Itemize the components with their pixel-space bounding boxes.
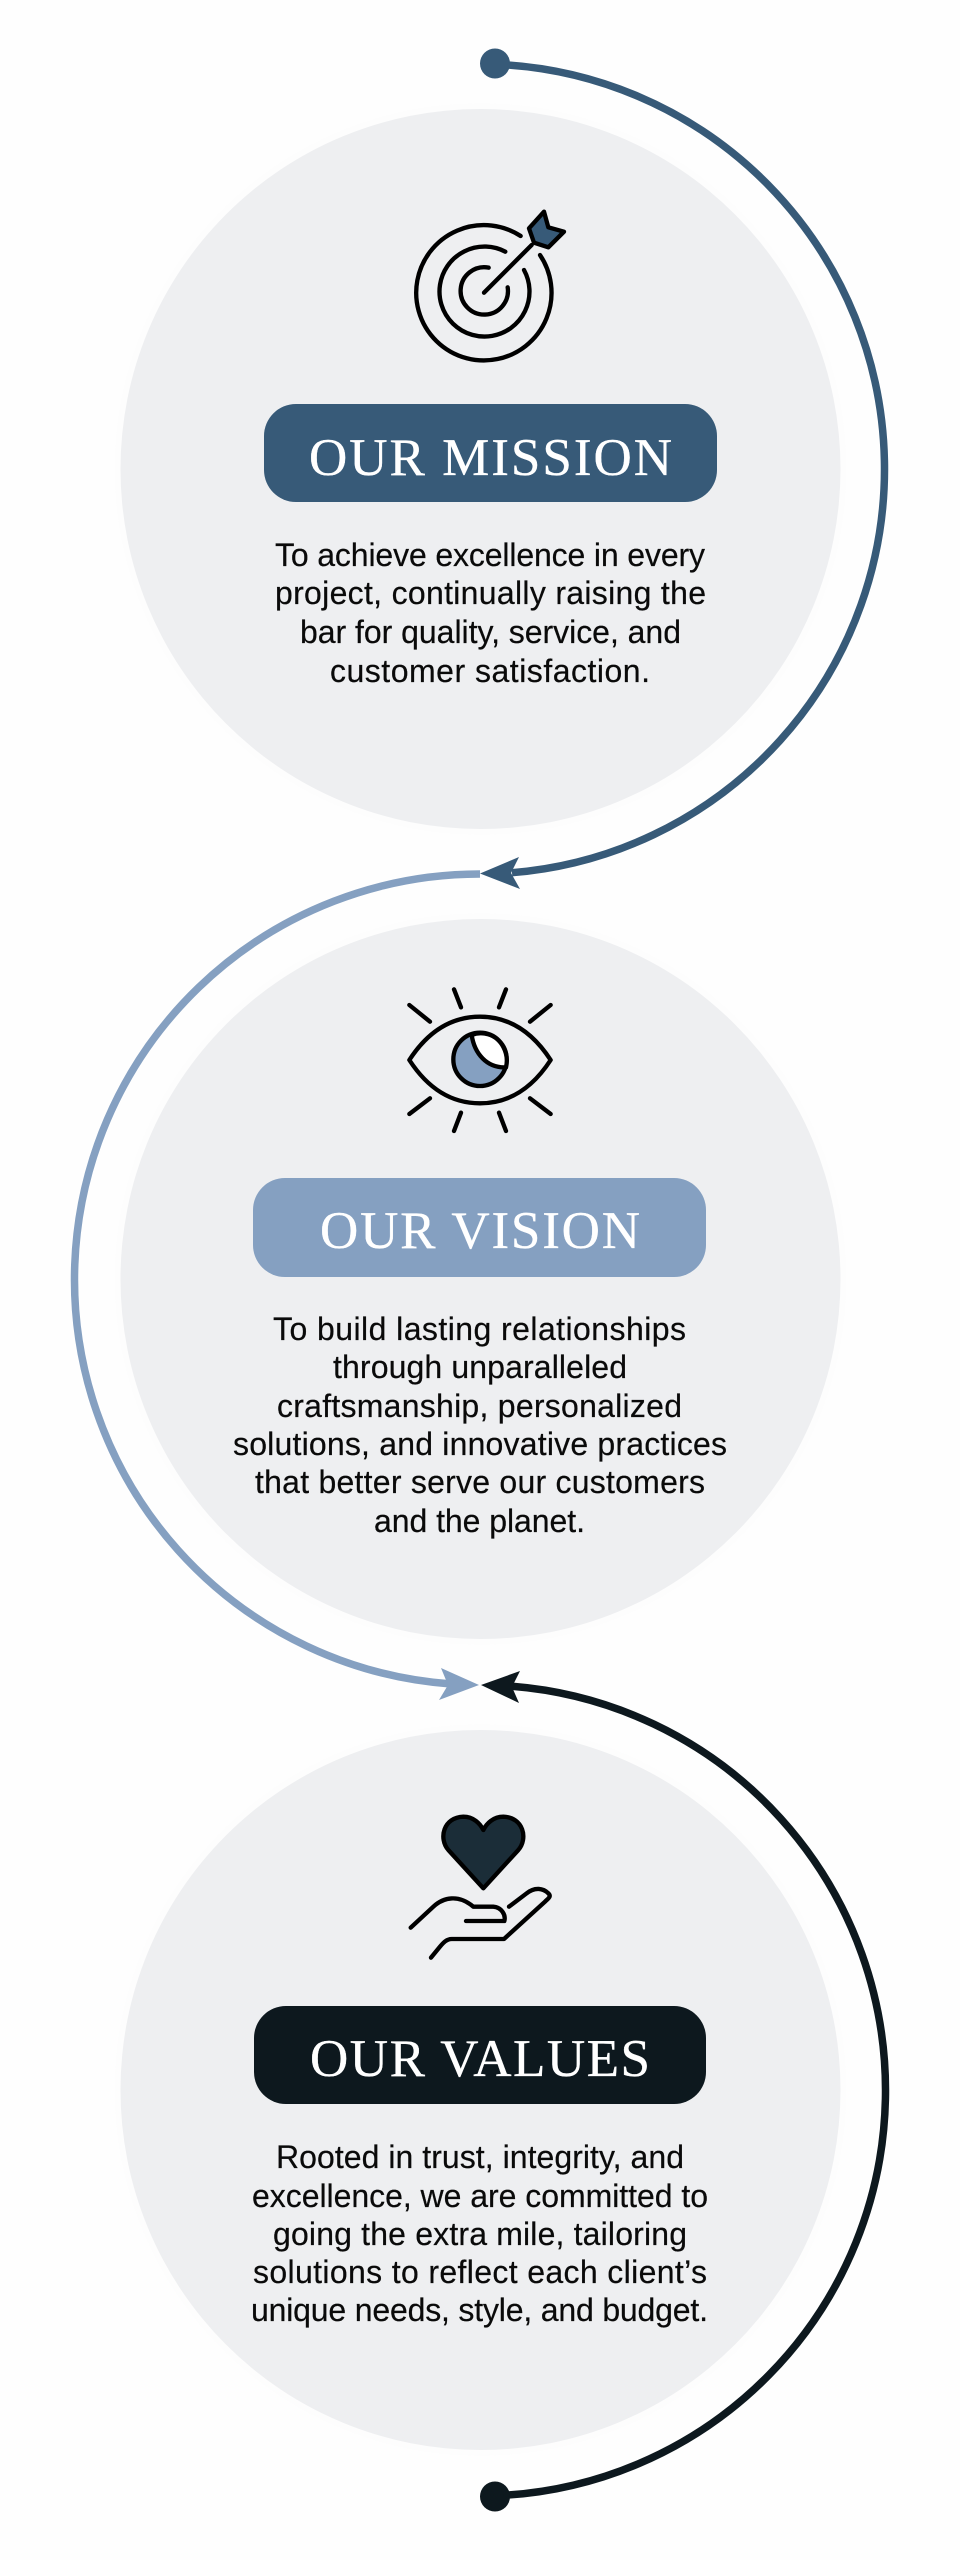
values text: excellence, we are committed to (252, 2178, 708, 2214)
values text: solutions to reflect each client’s (253, 2254, 707, 2290)
values text: Rooted in trust, integrity, and (276, 2139, 684, 2175)
vision text: that better serve our customers (255, 1464, 705, 1500)
heading pill: our values: OUR VALUES (310, 2030, 650, 2088)
mission text: project, continually raising the (275, 575, 706, 611)
mission text: customer satisfaction. (330, 653, 650, 689)
values text: going the extra mile, tailoring (273, 2216, 687, 2252)
vision text: and the planet. (374, 1503, 585, 1539)
heading pill: our vision: OUR VISION (320, 1202, 640, 1260)
arrow: values arc (480, 1671, 886, 2512)
heading pill: our mission (264, 404, 717, 502)
icon: target with arrow (416, 212, 564, 360)
panel: our mission (114, 103, 846, 835)
vision text: solutions, and innovative practices (233, 1426, 727, 1462)
heading pill: our vision (253, 1178, 706, 1277)
vision text: through unparalleled (333, 1349, 627, 1385)
values circle background (114, 1724, 846, 2456)
values text (251, 2139, 708, 2328)
mission text (275, 537, 706, 689)
mission text: To achieve excellence in every (275, 537, 705, 573)
panel: our vision (114, 913, 846, 1645)
icon: eye with rays (409, 989, 551, 1131)
mission circle background (114, 103, 846, 835)
vision text (233, 1311, 727, 1539)
values text: unique needs, style, and budget. (251, 2292, 708, 2328)
icon: heart over open hand (411, 1817, 550, 1958)
mission text: bar for quality, service, and (300, 614, 681, 650)
heading pill: our mission: OUR MISSION (309, 429, 672, 487)
vision circle background (114, 913, 846, 1645)
heading pill: our values (254, 2006, 706, 2104)
vision text: To build lasting relationships (273, 1311, 686, 1347)
panel: our values (114, 1724, 846, 2456)
vision text: craftsmanship, personalized (277, 1388, 682, 1424)
arrow: mission arc (480, 48, 884, 889)
arrow: vision arc (74, 874, 480, 1700)
